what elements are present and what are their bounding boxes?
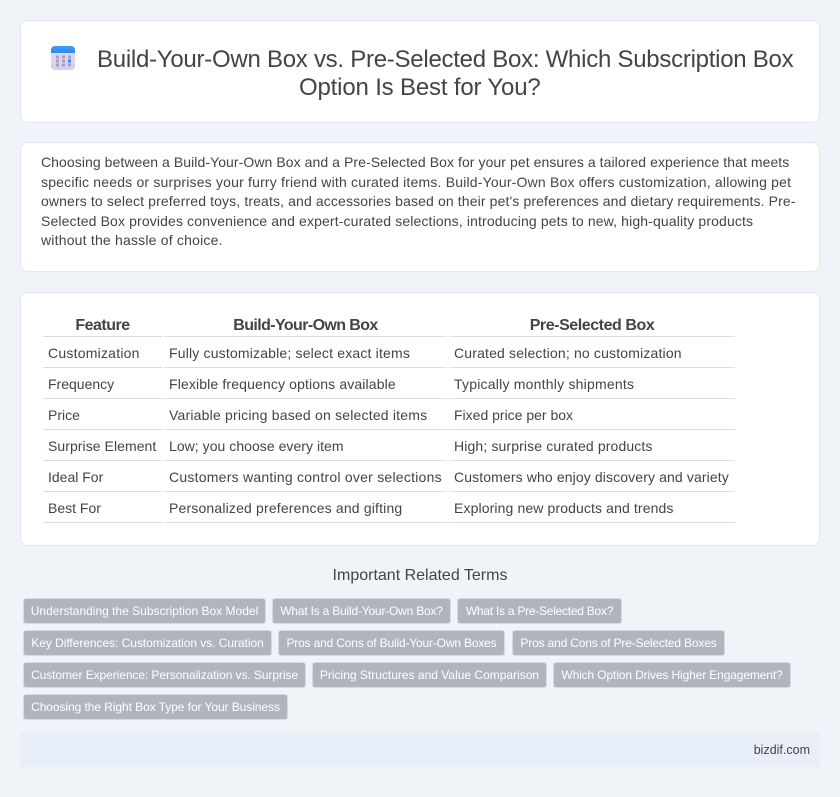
panel: header [20, 20, 820, 123]
row: best for: Best For [48, 500, 101, 516]
row: price: Variable pricing based on selected items [169, 407, 427, 423]
row: best for [48, 500, 674, 516]
intro text: Selected Box provides convenience and expert-curated selections, introducing pets to new, high-quality products [41, 213, 753, 229]
row: surprise element: Low; you choose every item [169, 438, 344, 454]
panel: comparison table [20, 292, 820, 546]
row: frequency: Frequency [48, 376, 114, 392]
related term tags: Pros and Cons of Pre-Selected Boxes [520, 636, 717, 650]
row: customization: Customization [48, 345, 140, 361]
row: price: Price [48, 407, 80, 423]
intro text: specific needs or surprises your furry friend with curated items. Build-Your-Own Box offers customization, allowing pet [41, 174, 791, 190]
row: ideal for: Customers who enjoy discovery and variety [454, 469, 729, 485]
table header [75, 317, 655, 334]
row: surprise element [48, 438, 653, 454]
intro text: Choosing between a Build-Your-Own Box and a Pre-Selected Box for your pet ensures a tailored experience that meets [41, 154, 789, 170]
row: customization: Fully customizable; select exact items [169, 345, 410, 361]
row: frequency [48, 376, 634, 392]
row: customization: Curated selection; no customization [454, 345, 682, 361]
row: ideal for [48, 469, 729, 485]
row: ideal for: Customers wanting control over selections [169, 469, 442, 485]
related term tags: Pros and Cons of Build-Your-Own Boxes [286, 636, 497, 650]
title: Option Is Best for You? [299, 74, 541, 101]
table header: Build-Your-Own Box [233, 317, 378, 334]
related term tags: Pricing Structures and Value Comparison [320, 668, 539, 682]
table header: Pre-Selected Box [530, 317, 654, 334]
related term tags: Key Differences: Customization vs. Curation [31, 636, 264, 650]
row: surprise element: Surprise Element [48, 438, 156, 454]
title [97, 46, 794, 101]
intro text: owners to select preferred toys, treats, and accessories based on their pet's preferences and dietary requirements. Pre- [41, 193, 796, 209]
footer bar: bizdif.com [754, 743, 810, 757]
heading: related terms: Important Related Terms [333, 567, 507, 584]
row: price: Fixed price per box [454, 407, 573, 423]
related term tags: What Is a Pre-Selected Box? [466, 604, 613, 618]
related term tags [23, 598, 791, 720]
intro text: without the hassle of choice. [41, 232, 223, 248]
related term tags: What Is a Build-Your-Own Box? [280, 604, 443, 618]
related term tags: Customer Experience: Personalization vs. Surprise [31, 668, 298, 682]
title: Build-Your-Own Box vs. Pre-Selected Box: Which Subscription Box [97, 46, 793, 73]
row: frequency: Flexible frequency options available [169, 376, 396, 392]
row: ideal for: Ideal For [48, 469, 103, 485]
table header: Feature [75, 317, 130, 334]
related term tags: Which Option Drives Higher Engagement? [561, 668, 783, 682]
row: price [48, 407, 573, 423]
footer bar [20, 733, 820, 767]
row: customization [48, 345, 682, 361]
related term tags: Choosing the Right Box Type for Your Business [31, 700, 280, 714]
intro text [41, 154, 796, 248]
row: surprise element: High; surprise curated products [454, 438, 653, 454]
related term tags: Understanding the Subscription Box Model [31, 604, 258, 618]
panel: intro [20, 142, 820, 272]
icon: calendar [51, 46, 75, 70]
row: frequency: Typically monthly shipments [454, 376, 634, 392]
row: best for: Personalized preferences and gifting [169, 500, 402, 516]
row: best for: Exploring new products and trends [454, 500, 674, 516]
